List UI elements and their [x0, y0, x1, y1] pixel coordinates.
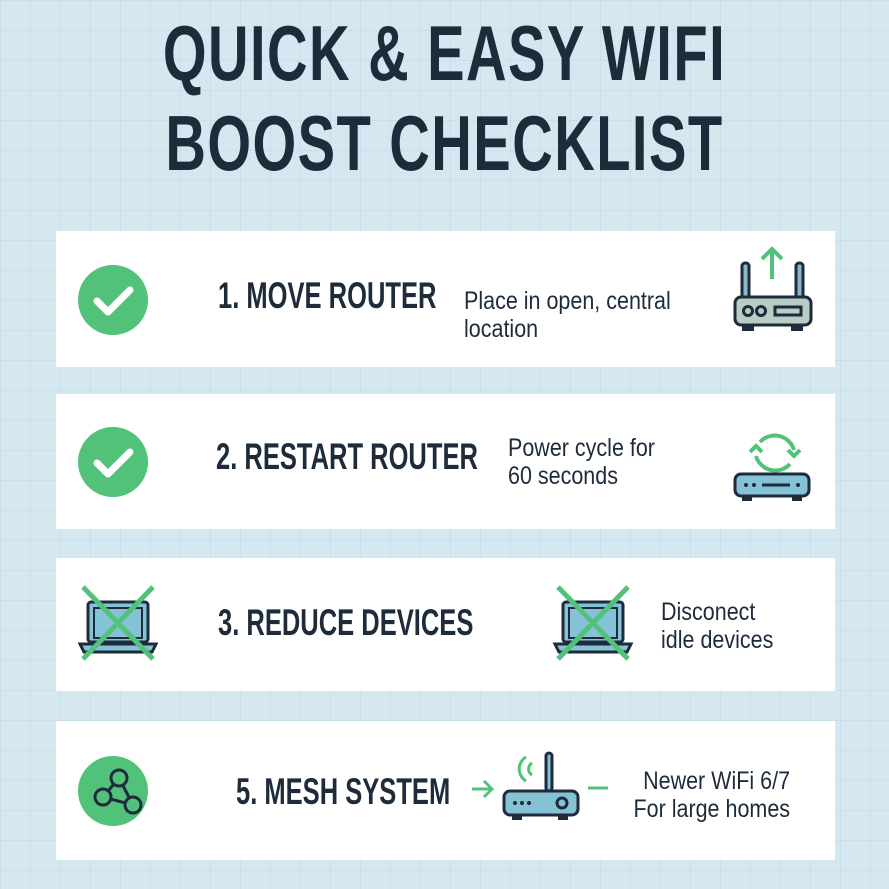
icon: router up [734, 246, 812, 331]
icon: check [78, 427, 148, 497]
description: For large homes [633, 795, 790, 823]
panel: mesh system [56, 721, 835, 860]
description: Newer WiFi 6/7 [643, 767, 790, 795]
panel: reduce devices [56, 558, 835, 691]
description: Power cycle for [508, 434, 655, 462]
icon: check [78, 265, 148, 335]
heading: 1. MOVE ROUTER [218, 275, 436, 316]
description [464, 287, 671, 343]
icon: laptop crossed [78, 585, 158, 661]
heading: 2. RESTART ROUTER [216, 436, 478, 477]
heading: 3. REDUCE DEVICES [218, 602, 473, 643]
title: QUICK & EASY WIFI [163, 9, 726, 97]
description: 60 seconds [508, 462, 618, 490]
description: location [464, 315, 538, 343]
icon: wifi router with arrow [472, 752, 608, 820]
panel: move router [56, 231, 835, 367]
title: BOOST CHECKLIST [165, 99, 724, 187]
heading: 5. MESH SYSTEM [236, 771, 450, 812]
icon: mesh [78, 756, 148, 826]
description: Place in open, central [464, 287, 671, 315]
icon: laptop crossed [552, 585, 634, 661]
panel: restart router [56, 394, 835, 529]
description: idle devices [661, 626, 773, 654]
description [661, 598, 773, 654]
description: Disconect [661, 598, 755, 626]
title [163, 9, 726, 187]
description [633, 767, 790, 823]
description [508, 434, 655, 490]
icon: router restart [734, 434, 810, 501]
